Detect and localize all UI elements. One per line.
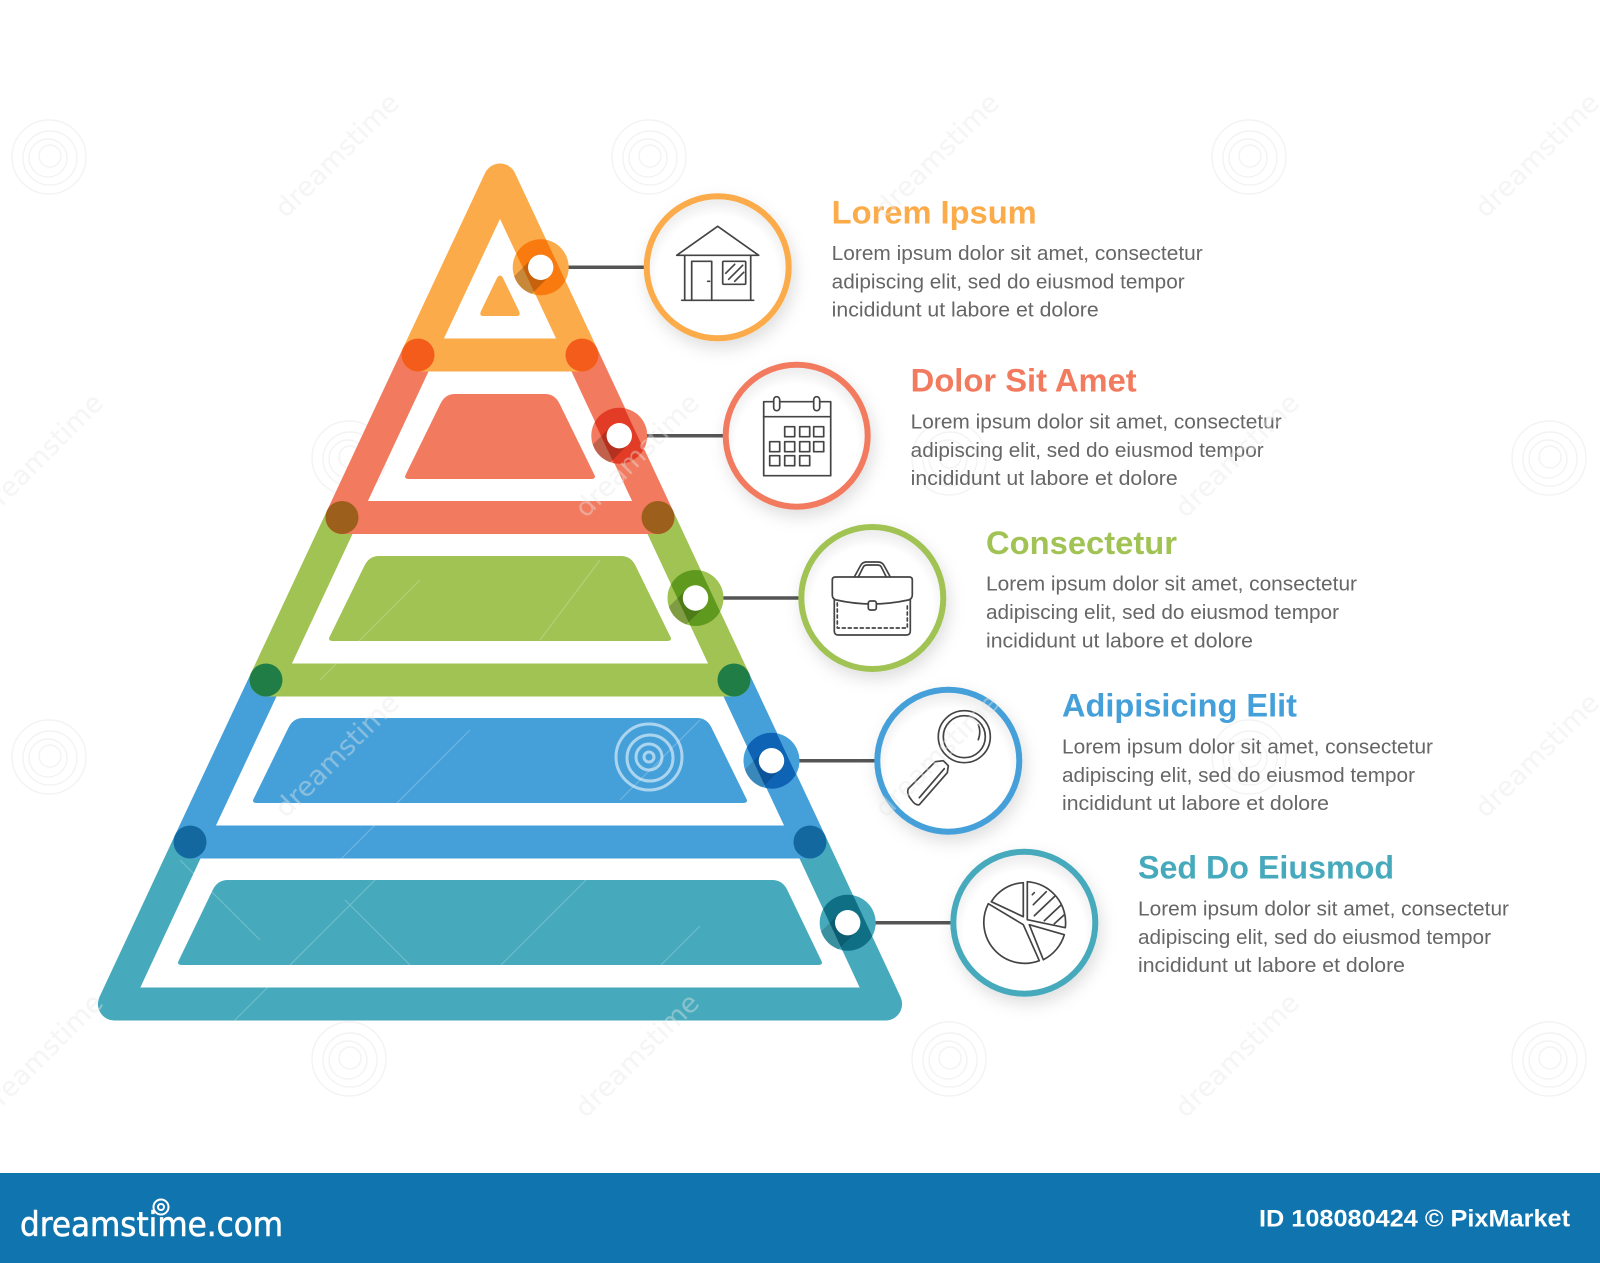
joints: [174, 338, 826, 858]
watermark spirals on background: [12, 120, 1586, 1096]
text block: Adipisicing Elit: Adipisicing Elit: [1062, 688, 1297, 724]
tier 2 frame: [342, 355, 658, 518]
text block: Lorem Ipsum: Lorem ipsum dolor sit amet, consectetur: [832, 242, 1203, 265]
tier 5 inner block: [178, 880, 822, 965]
tier 4 frame: [190, 680, 810, 842]
tier 5 frame: [114, 842, 886, 1004]
watermark overlay: dreamstime: [569, 387, 706, 524]
node 5: [820, 894, 876, 951]
icon: pie chart: [984, 882, 1066, 963]
text block: Consectetur: Lorem ipsum dolor sit amet, consectetur: [986, 573, 1357, 596]
node 2: [591, 408, 648, 464]
footer bar: [0, 1173, 1600, 1263]
text block: Lorem Ipsum: incididunt ut labore et dolore: [832, 299, 1099, 322]
text block: Dolor Sit Amet: [911, 363, 1282, 490]
node 4: [744, 732, 800, 789]
icon: briefcase: [832, 562, 912, 635]
icon circle 2: calendar: [726, 365, 868, 507]
icon circle 4: magnifier: [877, 690, 1019, 832]
text block: Dolor Sit Amet: Lorem ipsum dolor sit amet, consectetur: [911, 410, 1282, 433]
icon circle 1: house: [647, 196, 789, 338]
text block: Dolor Sit Amet: incididunt ut labore et dolore: [911, 467, 1178, 490]
icon circle 3: briefcase: [801, 527, 943, 669]
text block: Sed Do Eiusmod: Sed Do Eiusmod: [1138, 850, 1394, 886]
watermark overlay: dreamstime: [869, 87, 1006, 224]
text block: Lorem Ipsum: [832, 194, 1203, 322]
text block: Consectetur: incididunt ut labore et dolore: [986, 629, 1253, 652]
text block: Consectetur: [986, 525, 1357, 652]
text block: Sed Do Eiusmod: incididunt ut labore et dolore: [1138, 954, 1405, 977]
icon circle 5: pie chart: [953, 852, 1095, 994]
text block: Consectetur: adipiscing elit, sed do eiusmod tempor: [986, 601, 1339, 624]
text block: Consectetur: Consectetur: [986, 525, 1177, 561]
text block: Adipisicing Elit: adipiscing elit, sed do eiusmod tempor: [1062, 764, 1415, 787]
text block: Dolor Sit Amet: adipiscing elit, sed do eiusmod tempor: [911, 439, 1264, 462]
icon: magnifying glass: [908, 711, 990, 805]
watermark overlay: dreamstime: [269, 687, 406, 824]
text block: Lorem Ipsum: Lorem Ipsum: [832, 194, 1037, 230]
tier 2 inner block: [405, 394, 595, 479]
text block: Dolor Sit Amet: Dolor Sit Amet: [911, 363, 1137, 399]
tier 1 inner triangle: [480, 276, 520, 316]
text block: Adipisicing Elit: incididunt ut labore et dolore: [1062, 792, 1329, 815]
text block: Adipisicing Elit: Lorem ipsum dolor sit amet, consectetur: [1062, 735, 1433, 758]
text block: Adipisicing Elit: [1062, 688, 1433, 815]
footer credit: ID 108080424 © PixMarket: [1259, 1206, 1570, 1233]
node 3: [668, 570, 724, 626]
text block: Lorem Ipsum: adipiscing elit, sed do eiusmod tempor: [832, 270, 1185, 293]
pyramid: [114, 180, 886, 1004]
tier 1 frame: [418, 180, 582, 355]
watermark overlay: dreamstime: [269, 87, 406, 224]
text block: Sed Do Eiusmod: [1138, 850, 1509, 977]
icon: logo spiral: [154, 1200, 168, 1214]
watermark lines over the pyramid: [180, 560, 700, 1020]
node 1: [512, 239, 569, 296]
tier 3 frame: [266, 518, 734, 680]
icon: house: [677, 226, 759, 300]
text block: Sed Do Eiusmod: Lorem ipsum dolor sit amet, consectetur: [1138, 897, 1509, 920]
footer logo: dreamstime.com: [20, 1205, 283, 1245]
text block: Sed Do Eiusmod: adipiscing elit, sed do eiusmod tempor: [1138, 926, 1491, 949]
tier 4 inner block: [253, 718, 747, 803]
icon: calendar: [764, 397, 831, 476]
watermark overlay: dreamstime: [1169, 987, 1306, 1124]
connector lines: [566, 267, 953, 923]
watermark overlay: dreamstime: [869, 687, 1006, 824]
watermark overlay: dreamstime: [569, 987, 706, 1124]
watermark overlay: dreamstime: [1169, 387, 1306, 524]
watermark spiral on blue block: [616, 724, 682, 790]
tier 3 inner block: [329, 556, 671, 641]
